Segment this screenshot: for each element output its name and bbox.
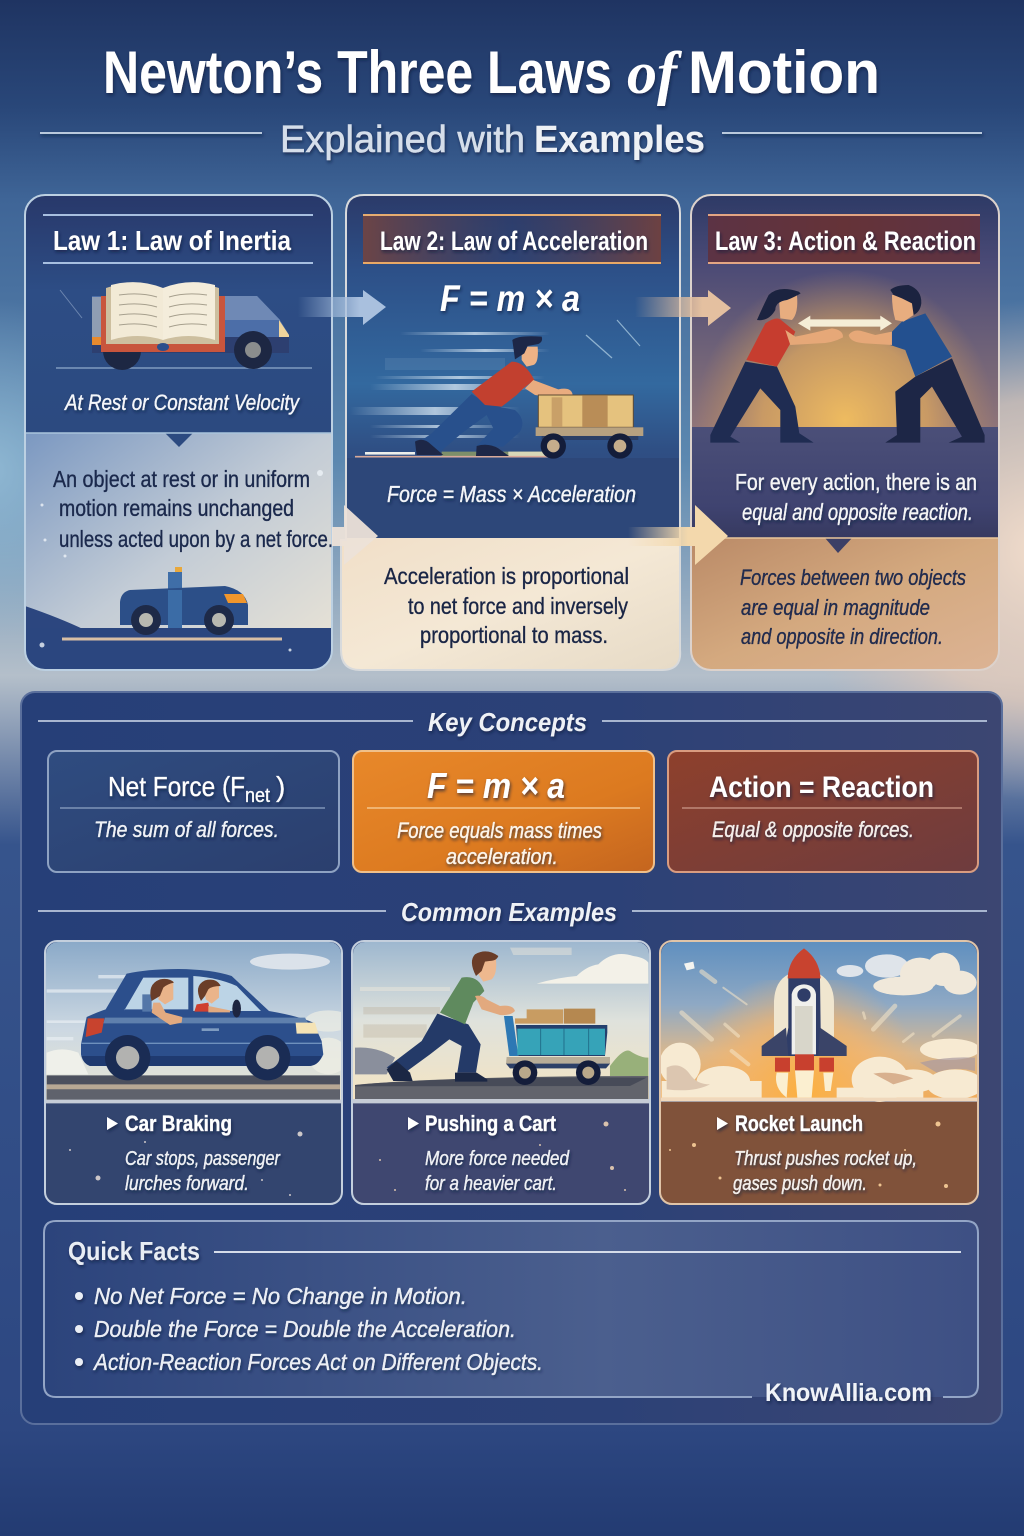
subtitle: Explained with bbox=[280, 119, 525, 161]
law 3 description: and opposite in direction. bbox=[741, 624, 943, 649]
arrow: law 1 to law 2 lower bbox=[332, 505, 378, 565]
car braking label: Car Braking bbox=[125, 1111, 232, 1136]
title: of bbox=[627, 40, 682, 106]
heading: common examples: Common Examples bbox=[401, 897, 617, 927]
law 3 statement: For every action, there is an bbox=[735, 469, 977, 495]
panel: law 2 bbox=[341, 195, 682, 672]
rocket launch label: Rocket Launch bbox=[735, 1111, 863, 1136]
quick facts list: No Net Force = No Change in Motion. bbox=[94, 1283, 467, 1309]
icon: person pushing cart bbox=[350, 948, 650, 1103]
law 3 description: are equal in magnitude bbox=[741, 595, 930, 620]
panel: law 3 bbox=[691, 195, 999, 670]
arrow: law 1 to law 2 bbox=[298, 290, 386, 325]
law 3 statement: equal and opposite reaction. bbox=[742, 499, 973, 525]
illustration: man pushing cart bbox=[355, 336, 643, 459]
card: action reaction: Action = Reaction bbox=[709, 771, 934, 804]
law 2 heading bbox=[363, 215, 661, 263]
panel: law 1 bbox=[25, 195, 333, 670]
formula: F = m × a bbox=[440, 278, 580, 319]
card: action reaction: Equal & opposite forces. bbox=[712, 817, 914, 842]
law 1 description: unless acted upon by a net force. bbox=[59, 526, 333, 552]
subtitle bbox=[40, 119, 982, 161]
illustration: two people pushing bbox=[710, 285, 985, 443]
law 3 description bbox=[740, 565, 966, 649]
icon: rocket bbox=[659, 948, 983, 1102]
panel: quick facts bbox=[44, 1221, 978, 1407]
law 2 description: proportional to mass. bbox=[420, 622, 608, 648]
card: net force: ) bbox=[276, 771, 285, 802]
quick facts list: Double the Force = Double the Acceleration. bbox=[94, 1316, 516, 1342]
example card: rocket launch bbox=[659, 941, 983, 1204]
car braking label bbox=[107, 1111, 281, 1195]
example card: car braking bbox=[45, 941, 352, 1204]
law 1 description: An object at rest or in uniform bbox=[53, 466, 310, 492]
card: net force: net bbox=[245, 785, 270, 807]
law 2 description: Acceleration is proportional bbox=[384, 563, 629, 589]
quick facts heading: Quick Facts bbox=[68, 1236, 200, 1266]
card: net force: Net Force (F bbox=[108, 771, 245, 802]
heading: key concepts: Key Concepts bbox=[428, 707, 587, 737]
law 3 heading bbox=[708, 215, 980, 263]
arrow: law 2 to law 3 bbox=[635, 290, 731, 326]
law 1 description: motion remains unchanged bbox=[59, 495, 294, 521]
brand credit: KnowAllia.com bbox=[765, 1379, 932, 1407]
pushing a cart label: More force needed bbox=[425, 1148, 570, 1170]
title: Motion bbox=[688, 39, 880, 106]
law 2 heading: Law 2: Law of Acceleration bbox=[380, 226, 648, 256]
panel: key concepts and examples bbox=[21, 692, 1002, 1424]
pushing a cart label: for a heavier cart. bbox=[425, 1173, 557, 1195]
card: formula: acceleration. bbox=[446, 844, 558, 869]
law 1 caption: At Rest or Constant Velocity bbox=[63, 390, 301, 415]
icon: small car bbox=[62, 567, 282, 639]
law 2 description bbox=[384, 563, 629, 648]
card: formula: F = m × a bbox=[427, 765, 565, 806]
subtitle: Examples bbox=[534, 119, 705, 161]
car braking label: lurches forward. bbox=[125, 1173, 249, 1195]
car braking label: Car stops, passenger bbox=[125, 1148, 281, 1170]
example card: pushing a cart bbox=[350, 941, 650, 1204]
card: net force: The sum of all forces. bbox=[94, 817, 279, 842]
card: action reaction bbox=[668, 751, 978, 872]
card: net force bbox=[48, 751, 339, 872]
law 1 description bbox=[53, 466, 333, 552]
title: Newton’s Three Laws bbox=[103, 39, 612, 106]
rocket launch label bbox=[717, 1111, 917, 1195]
icon: book on truck bbox=[56, 282, 312, 370]
pushing a cart label: Pushing a Cart bbox=[425, 1111, 557, 1136]
card: formula: Force equals mass times bbox=[397, 818, 602, 843]
arrow: law 2 to law 3 lower bbox=[628, 505, 728, 565]
law 1 heading: Law 1: Law of Inertia bbox=[53, 225, 291, 256]
law 3 statement bbox=[735, 469, 977, 525]
quick facts list: Action-Reaction Forces Act on Different Objects. bbox=[92, 1349, 543, 1375]
law 2 caption: Force = Mass × Acceleration bbox=[387, 481, 636, 507]
pushing a cart label bbox=[408, 1111, 570, 1195]
law 2 description: to net force and inversely bbox=[408, 593, 628, 619]
rocket launch label: gases push down. bbox=[733, 1173, 867, 1195]
quick facts list bbox=[75, 1283, 543, 1375]
rocket launch label: Thrust pushes rocket up, bbox=[734, 1148, 917, 1170]
card: formula bbox=[353, 751, 654, 872]
law 3 description: Forces between two objects bbox=[740, 565, 966, 590]
icon: blue car bbox=[45, 954, 352, 1103]
